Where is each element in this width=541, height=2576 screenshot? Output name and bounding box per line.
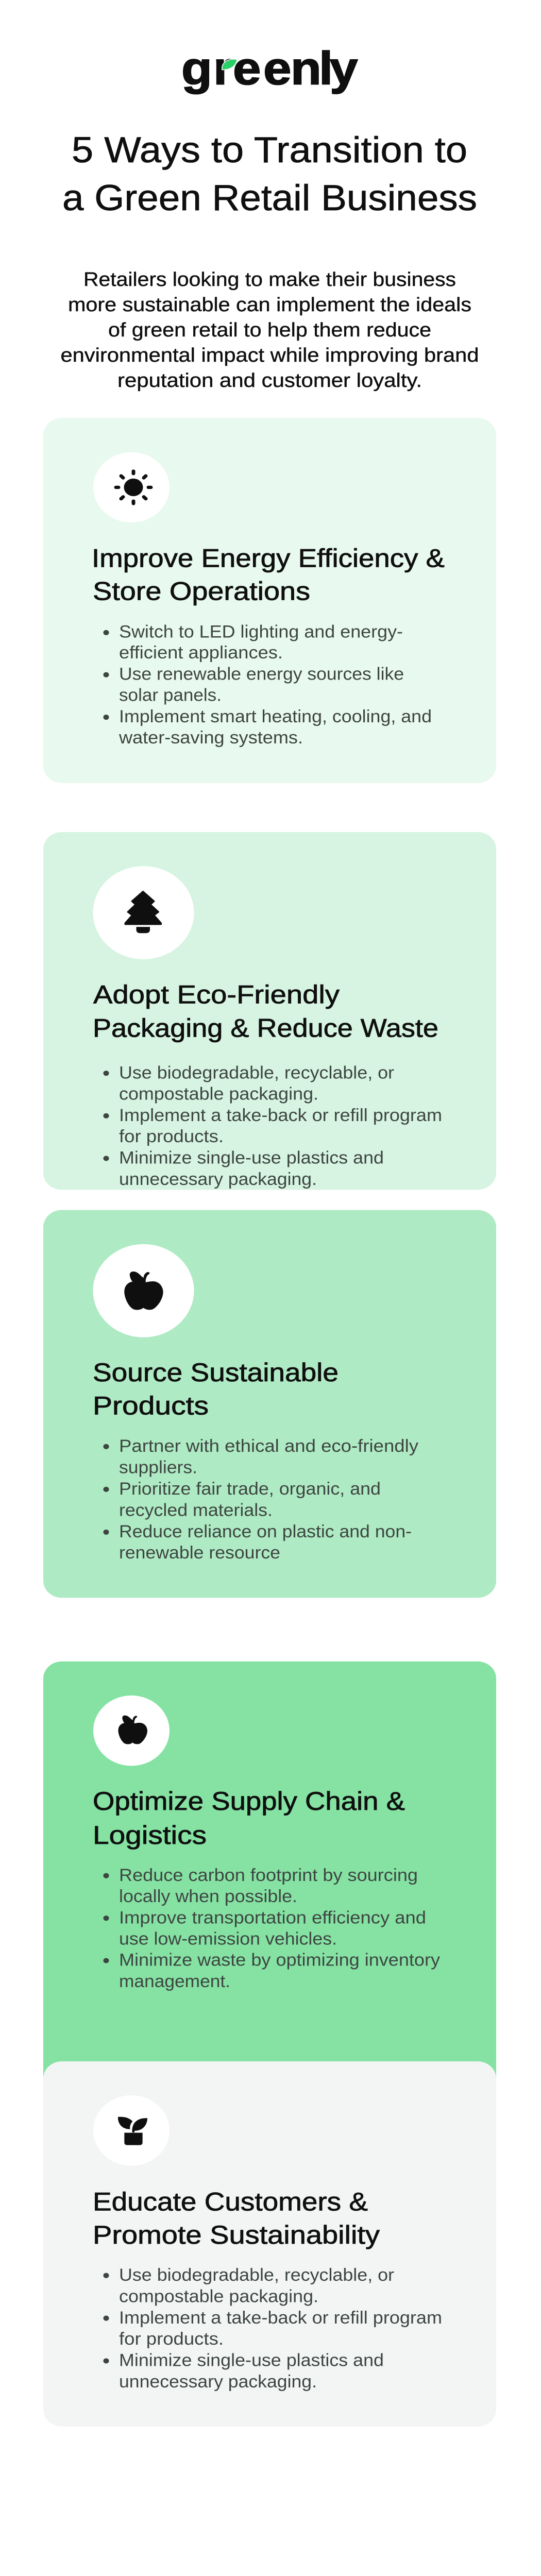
bullet list bbox=[103, 2265, 442, 2392]
heading bbox=[93, 1359, 339, 1420]
bullet list: Minimize single-use plastics and bbox=[119, 1148, 384, 1167]
title: 5 Ways to Transition to bbox=[72, 130, 467, 171]
bullet list bbox=[103, 1865, 440, 1991]
heading: Educate Customers & bbox=[93, 2188, 368, 2216]
bullet list: water-saving systems. bbox=[119, 727, 303, 748]
bullet list: management. bbox=[119, 1971, 230, 1991]
bullet list: locally when possible. bbox=[119, 1886, 297, 1906]
bullet list: Switch to LED lighting and energy- bbox=[119, 622, 403, 641]
panel: supply chain and logistics bbox=[43, 1662, 496, 2094]
bullet list bbox=[103, 1063, 442, 1189]
heading: Adopt Eco-Friendly bbox=[93, 980, 340, 1009]
intro paragraph: of green retail to help them reduce bbox=[108, 319, 431, 341]
intro paragraph: Retailers looking to make their business bbox=[83, 269, 456, 291]
bullet list: Use renewable energy sources like bbox=[119, 664, 404, 684]
heading: Logistics bbox=[93, 1821, 207, 1850]
bullet list: Implement a take-back or refill program bbox=[119, 1105, 442, 1125]
panel: eco-friendly packaging bbox=[43, 832, 496, 1190]
logo: greenly: greenly bbox=[181, 42, 358, 94]
bullet list: Reduce carbon footprint by sourcing bbox=[119, 1865, 418, 1885]
intro paragraph: environmental impact while improving brand bbox=[61, 344, 479, 366]
bullet list: Use biodegradable, recyclable, or bbox=[119, 1063, 394, 1082]
heading: Source Sustainable bbox=[93, 1359, 339, 1387]
heading: Products bbox=[93, 1392, 209, 1420]
heading bbox=[93, 1787, 405, 1850]
icon: apple bbox=[93, 1244, 194, 1337]
bullet list: use low-emission vehicles. bbox=[119, 1929, 337, 1948]
panel: educate customers bbox=[43, 2061, 496, 2427]
bullet list: Prioritize fair trade, organic, and bbox=[119, 1479, 381, 1499]
bullet list: renewable resource bbox=[119, 1543, 280, 1563]
bullet list: for products. bbox=[119, 1127, 224, 1146]
heading: Store Operations bbox=[93, 578, 310, 606]
bullet list: Reduce reliance on plastic and non- bbox=[119, 1521, 412, 1541]
bullet list: Improve transportation efficiency and bbox=[119, 1908, 426, 1927]
icon: sun bbox=[93, 452, 170, 522]
bullet list: Minimize waste by optimizing inventory bbox=[119, 1950, 440, 1970]
title bbox=[62, 130, 477, 218]
bullet list: Use biodegradable, recyclable, or bbox=[119, 2265, 394, 2285]
bullet list: Partner with ethical and eco-friendly bbox=[119, 1436, 418, 1456]
title: a Green Retail Business bbox=[62, 178, 477, 218]
bullet list: Minimize single-use plastics and bbox=[119, 2350, 384, 2370]
panel: improve energy efficiency bbox=[43, 418, 496, 783]
heading bbox=[93, 2188, 380, 2250]
intro paragraph: more sustainable can implement the ideals bbox=[68, 294, 471, 316]
icon: apple bbox=[93, 1696, 170, 1766]
bullet list: recycled materials. bbox=[119, 1500, 273, 1520]
icon: pine tree bbox=[93, 866, 194, 959]
intro paragraph: reputation and customer loyalty. bbox=[117, 370, 422, 392]
bullet list: suppliers. bbox=[119, 1458, 197, 1477]
heading bbox=[92, 544, 445, 606]
intro paragraph bbox=[61, 269, 479, 392]
icon: potted plant bbox=[93, 2095, 170, 2166]
panel: sustainable products bbox=[43, 1210, 496, 1598]
bullet list: unnecessary packaging. bbox=[119, 2371, 317, 2392]
bullet list: for products. bbox=[119, 2329, 224, 2349]
bullet list bbox=[103, 622, 432, 748]
bullet list: efficient appliances. bbox=[119, 642, 283, 663]
heading: Improve Energy Efficiency & bbox=[92, 544, 445, 573]
bullet list: Implement smart heating, cooling, and bbox=[119, 706, 432, 726]
bullet list bbox=[103, 1436, 418, 1563]
bullet list: solar panels. bbox=[119, 685, 222, 705]
bullet list: compostable packaging. bbox=[119, 2286, 318, 2306]
bullet list: compostable packaging. bbox=[119, 1084, 318, 1104]
heading: Promote Sustainability bbox=[93, 2221, 380, 2250]
bullet list: unnecessary packaging. bbox=[119, 1169, 317, 1189]
heading: Optimize Supply Chain & bbox=[93, 1787, 405, 1816]
heading bbox=[93, 980, 438, 1043]
heading: Packaging & Reduce Waste bbox=[93, 1014, 438, 1043]
bullet list: Implement a take-back or refill program bbox=[119, 2308, 442, 2327]
